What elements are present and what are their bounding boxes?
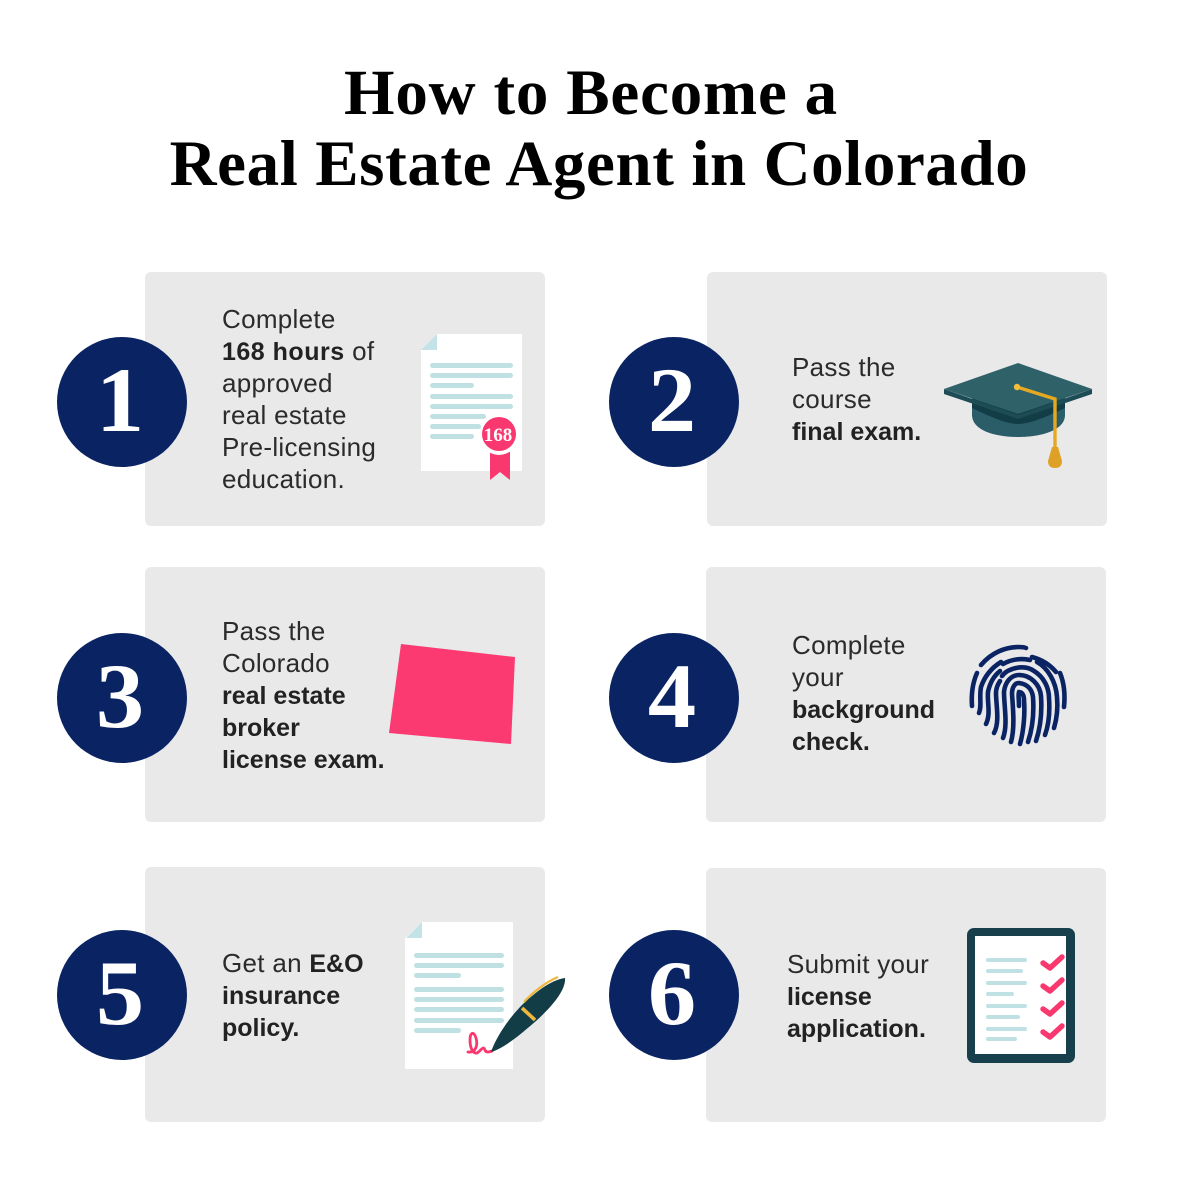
number 1 (57, 337, 187, 467)
number 4 (609, 633, 739, 763)
text: step 4: Complete (792, 630, 906, 660)
text: step 1: Complete (222, 304, 336, 334)
text: step 4: background (792, 696, 935, 724)
panel: step 5 (145, 867, 545, 1122)
text: step 1: Pre-licensing (222, 432, 376, 462)
text: step 6: application. (787, 1015, 926, 1043)
title: How to Become a (344, 57, 838, 129)
number 6: 6 (648, 942, 696, 1044)
text: step 3: license exam. (222, 746, 385, 774)
text: step 6: Submit your (787, 949, 929, 979)
text: step 5: insurance (222, 982, 340, 1010)
panel: step 4 (706, 567, 1106, 822)
text: step 5 (222, 948, 364, 1042)
number 6 (609, 930, 739, 1060)
panel: step 6 (706, 868, 1106, 1122)
number 4: 4 (648, 645, 696, 747)
text: step 6: license (787, 983, 872, 1011)
text: step 3 (222, 616, 385, 774)
text: step 2: course (792, 384, 872, 414)
text: step 2 (792, 352, 921, 446)
icon: certificate document: 168 (484, 425, 512, 446)
title (170, 57, 1028, 200)
panel: step 1 (145, 272, 545, 526)
text: step 6 (787, 949, 929, 1043)
text: step 5: policy. (222, 1014, 299, 1042)
text: step 3: Pass the (222, 616, 326, 646)
text: step 5: Get an E&O (222, 948, 364, 978)
text: step 1: real estate (222, 400, 347, 430)
text: step 2: Pass the (792, 352, 896, 382)
text: step 4: your (792, 662, 844, 692)
text: step 1: 168 hours of (222, 336, 374, 366)
text: step 4: check. (792, 728, 870, 756)
number 2: 2 (648, 349, 696, 451)
title: Real Estate Agent in Colorado (170, 128, 1028, 200)
text: step 2: final exam. (792, 418, 921, 446)
number 5 (57, 930, 187, 1060)
number 3 (57, 633, 187, 763)
panel: step 2 (707, 272, 1107, 526)
text: step 3: broker (222, 714, 300, 742)
text: step 1: approved (222, 368, 333, 398)
number 1: 1 (96, 349, 144, 451)
number 5: 5 (96, 942, 144, 1044)
text: step 1: education. (222, 464, 345, 494)
panel: step 3 (145, 567, 545, 822)
text: step 4 (792, 630, 935, 756)
text: step 3: real estate (222, 682, 346, 710)
text: step 1 (222, 304, 376, 494)
text: step 3: Colorado (222, 648, 330, 678)
number 3: 3 (96, 645, 144, 747)
number 2 (609, 337, 739, 467)
